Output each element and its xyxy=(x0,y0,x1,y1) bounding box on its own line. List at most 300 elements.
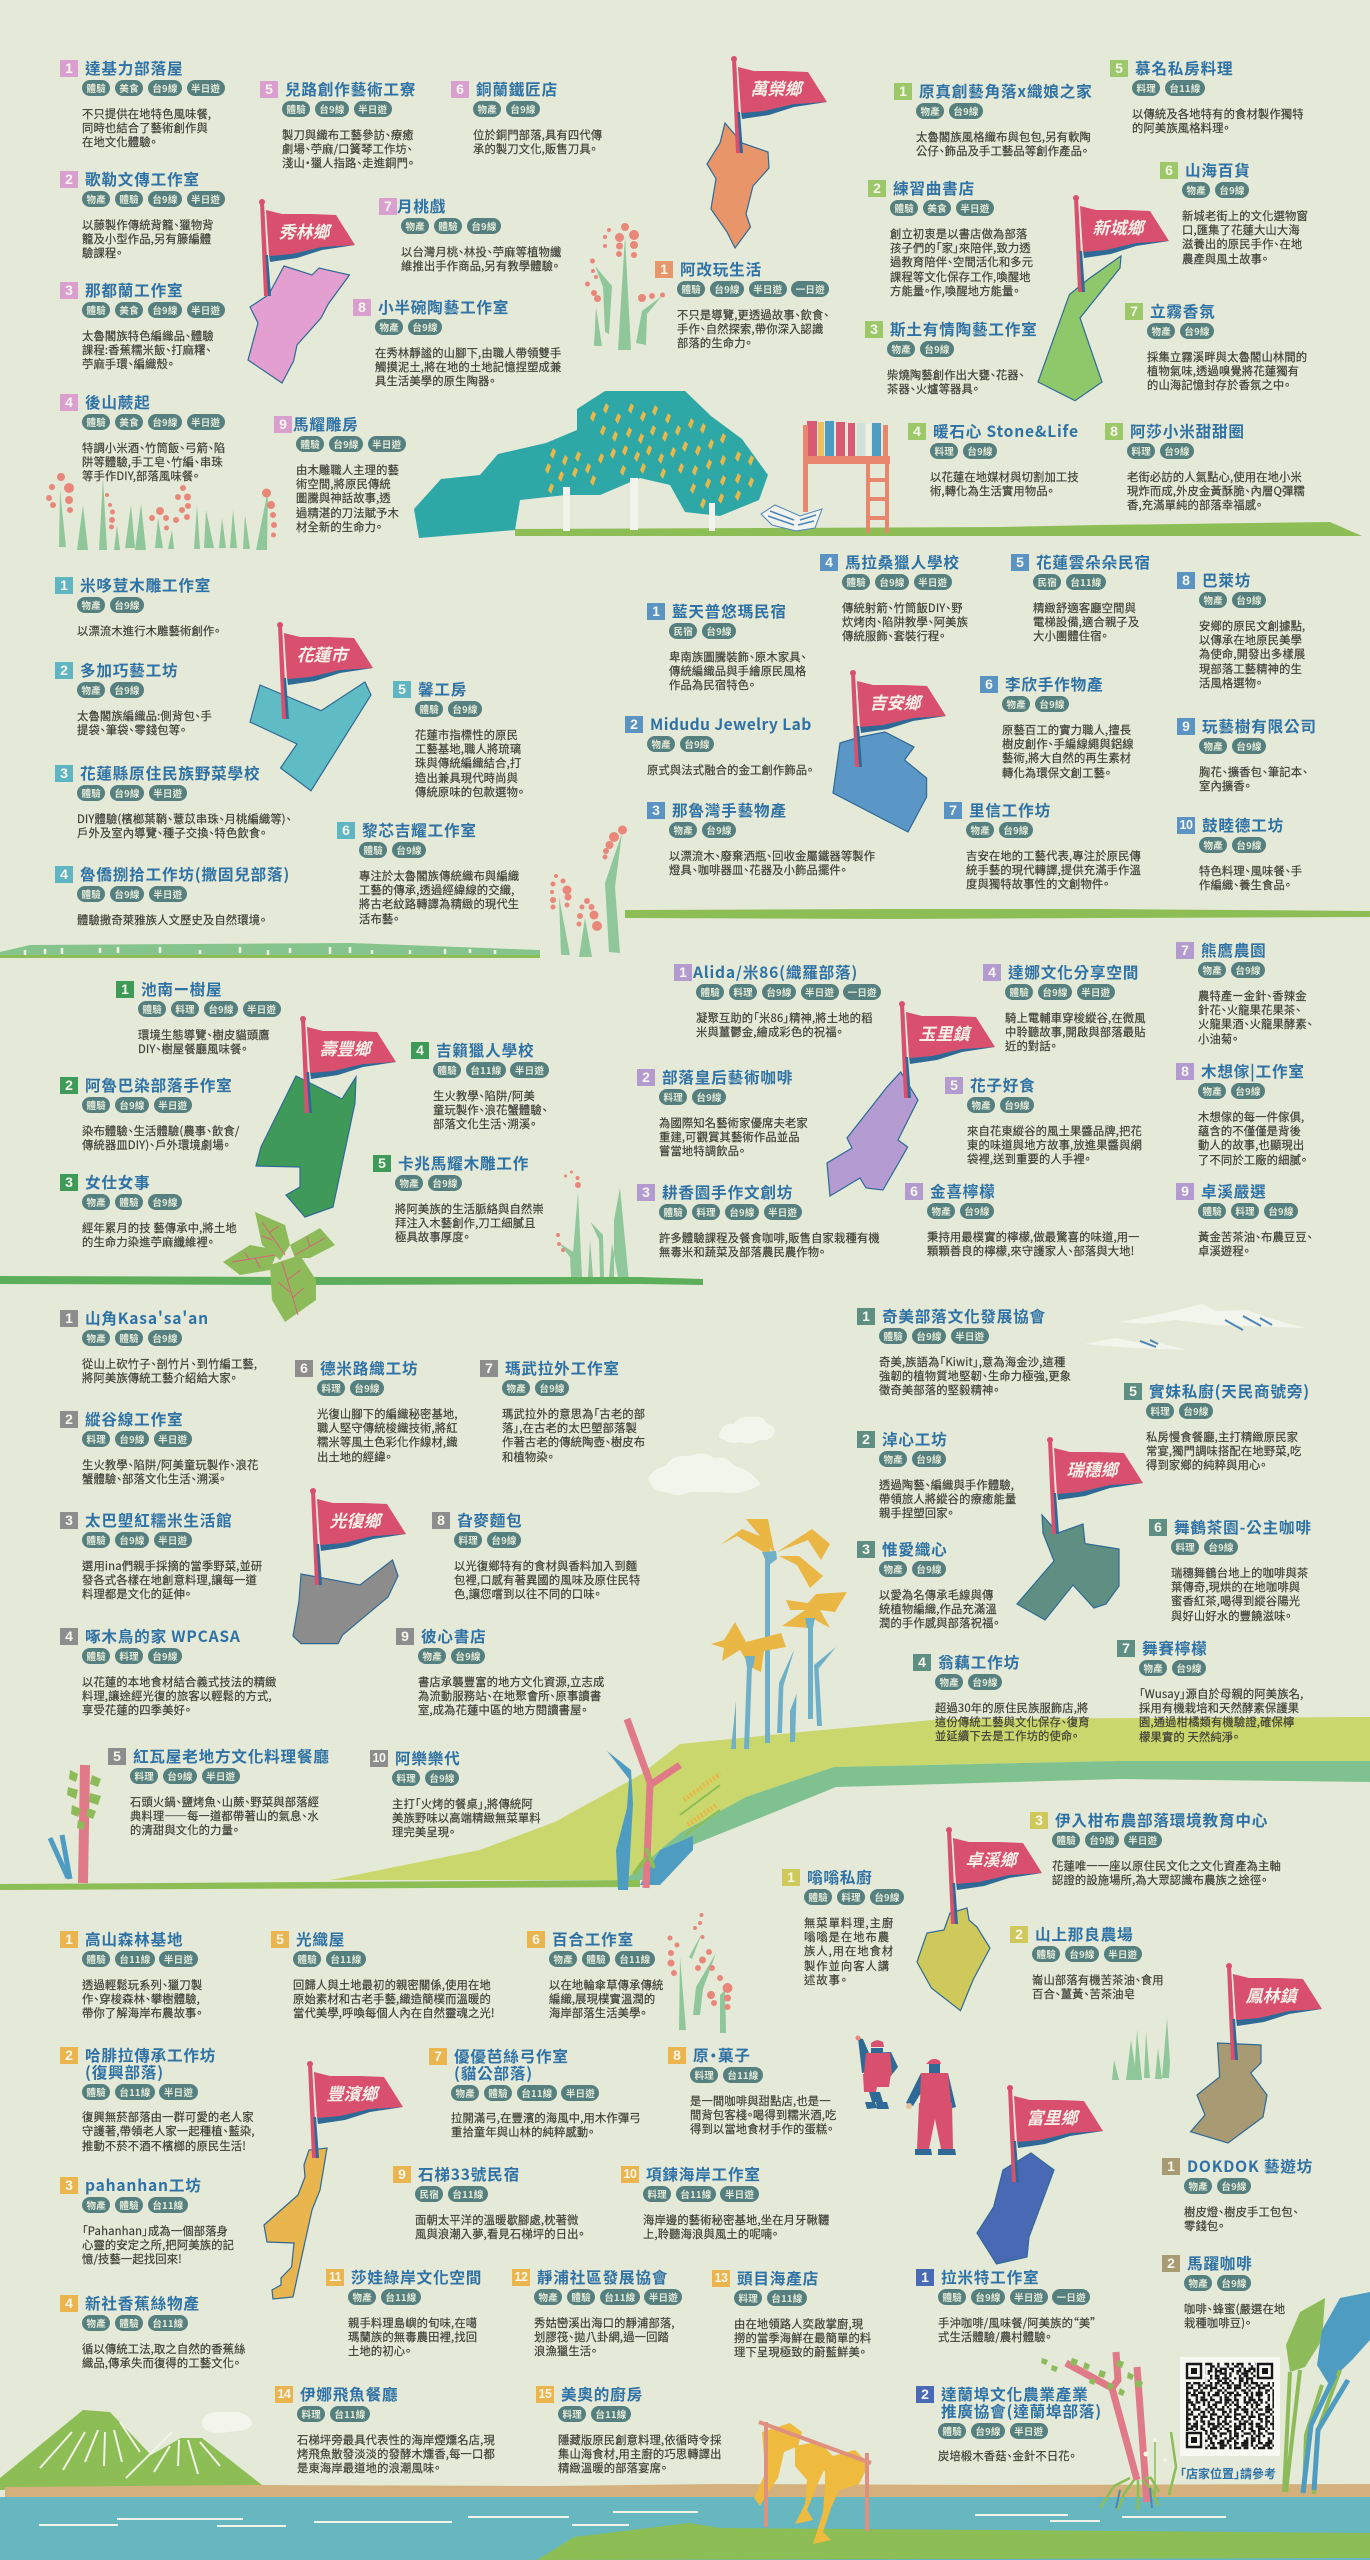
瑞穗鄉 1: 半日遊 xyxy=(955,1329,984,1343)
光復鄉 10: 美族野味以高端精緻無菜單料 xyxy=(392,1810,541,1826)
玉里鎮 1: 一日遊 xyxy=(848,985,877,999)
光復鄉 10: 10 xyxy=(373,1751,385,1765)
卓溪鄉 1: 述故事。 xyxy=(804,1972,848,1988)
吉安鄉 7: 統手藝的現代轉譯,提供充滿手作溫 xyxy=(966,862,1141,878)
豐濱鄉 14: 料理 xyxy=(302,2407,321,2421)
吉安鄉 2: 2 xyxy=(630,716,638,732)
瑞穗鄉 2: 親手捏塑回家。 xyxy=(879,1505,953,1521)
壽豐鄉 1: 環境生態導覽、樹皮貓頭鷹 xyxy=(138,1026,270,1042)
秀林鄉 2: 以藤製作傳統背籠、獵物背 xyxy=(82,216,214,232)
玉里鎮 9: 卓溪遊程。 xyxy=(1198,1243,1250,1259)
光復鄉 9: 書店承襲豐富的地方文化資源,立志成 xyxy=(418,1674,604,1690)
豐濱鄉 4: 循以傳統工法,取之自然的香蕉絲 xyxy=(82,2340,246,2356)
壽豐鄉 2: 台9線 xyxy=(119,1098,145,1112)
光復鄉 9: 物產 xyxy=(422,1649,442,1663)
flag: 鳳林鎮 xyxy=(1226,1963,1322,2060)
吉安鄉 8: 安鄉的原民文創據點, xyxy=(1199,618,1305,634)
光復鄉 1: 從山上砍竹子、剖竹片、到竹編工藝, xyxy=(82,1356,257,1372)
秀林鄉 9: 過精湛的刀法賦予木 xyxy=(296,505,399,521)
秀林鄉 6: 台9線 xyxy=(510,102,536,116)
光復鄉 2: 台9線 xyxy=(119,1432,145,1446)
卓溪鄉 3: 花蓮唯一一座以原住民文化之文化資產為主軸 xyxy=(1052,1858,1281,1874)
吉安鄉 4: 台9線 xyxy=(879,575,905,589)
新城鄉 1: 物產 xyxy=(920,104,940,118)
花蓮市 2: 提袋、筆袋、零錢包等。 xyxy=(77,722,186,738)
吉安鄉 8: 為使命,開發出多樣展 xyxy=(1199,646,1305,662)
花蓮市 4: 體驗 xyxy=(82,887,101,901)
玉里鎮 7: 針花、火龍果花果茶、 xyxy=(1198,1002,1301,1018)
新城鄉 7: 立霧香氛 xyxy=(1150,300,1216,322)
花蓮市 5: 工藝基地,職人將琉璃 xyxy=(415,741,521,757)
玉里鎮 8: 動人的故事,也顯現出 xyxy=(1198,1137,1304,1153)
grass near 鳳林 xyxy=(1112,2018,1170,2080)
秀林鄉 8: 物產 xyxy=(380,320,399,334)
壽豐鄉 4: 體驗 xyxy=(438,1063,457,1077)
flag: 萬榮鄉: 萬榮鄉 xyxy=(750,75,804,100)
豐濱鄉 9: 面朝太平洋的溫暖歇腳處,枕著微 xyxy=(415,2212,579,2228)
卓溪鄉 1: 1 xyxy=(787,1869,795,1885)
新城鄉 2: 過教育陪伴、空間活化和多元 xyxy=(890,254,1033,270)
豐濱鄉 3: 體驗 xyxy=(119,2198,139,2212)
光復鄉 1: 1 xyxy=(65,1310,73,1326)
豐濱鄉 13: 料理 xyxy=(738,2291,758,2305)
玉里鎮 9: 9 xyxy=(1181,1183,1189,1199)
新城鄉 1 xyxy=(894,80,1093,159)
瑞穗鄉 7: 舞賽檸檬 xyxy=(1142,1637,1208,1659)
壽豐鄉 5 xyxy=(373,1152,544,1245)
秀林鄉 7: 體驗 xyxy=(438,219,458,233)
吉安鄉 9 xyxy=(1177,715,1317,794)
瑞穗鄉 2: 2 xyxy=(862,1431,870,1447)
豐濱鄉 4: 新社香蕉絲物產 xyxy=(85,2292,200,2314)
吉安鄉 7: 台9線 xyxy=(1003,823,1029,837)
吉安鄉 10: 10 xyxy=(1180,818,1192,832)
flag: 秀林鄉: 秀林鄉 xyxy=(278,218,332,243)
豐濱鄉 14: 石梯坪旁最具代表性的海岸煙燻名店,現 xyxy=(297,2432,495,2448)
豐濱鄉 13: 台11線 xyxy=(771,2291,802,2305)
豐濱鄉 6: 物產 xyxy=(554,1952,573,1966)
秀林鄉 3: 台9線 xyxy=(152,303,178,317)
豐濱鄉 14: 烤飛魚散發淡淡的發酵木燻香,每一口都 xyxy=(297,2446,495,2462)
吉安鄉 9: 物產 xyxy=(1204,739,1223,753)
萬榮鄉 1: 台9線 xyxy=(714,282,740,296)
花蓮市 5: 珠與傳統編織結合,打 xyxy=(415,755,521,771)
壽豐鄉 1: 體驗 xyxy=(142,1002,162,1016)
瑞穗鄉 6 xyxy=(1149,1519,1312,1623)
光復鄉 9: 為流動服務站、在地聚會所、原事讀書 xyxy=(418,1688,601,1704)
豐濱鄉 4: 物產 xyxy=(86,2316,106,2330)
豐濱鄉 8: 間背包客棧。喝得到糯米酒,吃 xyxy=(690,2107,836,2123)
光復鄉 10: 阿樂樂代 xyxy=(395,1747,461,1769)
玉里鎮 5: 袋裡,送到重要的人手裡。 xyxy=(967,1151,1091,1167)
豐濱鄉 2: 半日遊 xyxy=(164,2084,193,2098)
光復鄉 4: 料理,讓途經光復的旅客以輕鬆的方式, xyxy=(82,1688,272,1704)
豐濱鄉 2 xyxy=(60,2047,255,2153)
新城鄉 3: 物產 xyxy=(892,342,911,356)
玉里鎮 9: 料理 xyxy=(1235,1204,1255,1218)
鳳林鎮 1: 台9線 xyxy=(1221,2179,1247,2193)
卓溪鄉 3 xyxy=(1030,1812,1281,1887)
flag: 玉里鎮: 玉里鎮 xyxy=(918,1020,972,1045)
瑞穗鄉 2: 帶領旅人將縱谷的療癒能量 xyxy=(879,1491,1016,1507)
瑞穗鄉 5: 台9線 xyxy=(1183,1404,1209,1418)
吉安鄉 8: 巴萊坊 xyxy=(1202,569,1251,591)
豐濱鄉 12: 12 xyxy=(515,2270,527,2284)
富里鄉 2: 半日遊 xyxy=(1014,2424,1043,2438)
瑞穗鄉 1: 奇美,族語為「Kiwit」,意為海金沙,這種 xyxy=(879,1354,1065,1370)
玉里鎮 2: 重建,可觀賞其藝術作品並品 xyxy=(659,1129,800,1145)
玉里鎮 8: 蘊含的不僅僅是背後 xyxy=(1198,1123,1301,1139)
秀林鄉 9: 由木雕職人主理的藝 xyxy=(296,462,399,478)
豐濱鄉 11: 11 xyxy=(329,2270,341,2284)
富里鄉 1: 台9線 xyxy=(975,2290,1001,2304)
flag: 壽豐鄉: 壽豐鄉 xyxy=(320,1035,373,1060)
光復鄉 10 xyxy=(370,1750,541,1840)
吉安鄉 5: 台11線 xyxy=(1070,575,1101,589)
玉里鎮 7: 火龍果酒、火龍果酵素、 xyxy=(1198,1016,1313,1032)
豐濱鄉 3: 3 xyxy=(65,2177,73,2193)
吉安鄉 5: 5 xyxy=(1016,554,1024,570)
瑞穗鄉 6: 葉傳奇,現烘的在地咖啡與 xyxy=(1171,1579,1300,1595)
豐濱鄉 1: 高山森林基地 xyxy=(85,1928,183,1950)
壽豐鄉 5: 極具故事厚度。 xyxy=(395,1229,469,1245)
光復鄉 9: 台9線 xyxy=(455,1649,481,1663)
tree xyxy=(414,391,768,538)
壽豐鄉 3: 經年累月的技 藝傳承中,將土地 xyxy=(82,1220,237,1236)
光復鄉 3: 選用ina們親手採摘的當季野菜,並研 xyxy=(82,1558,262,1574)
富里鄉 1 xyxy=(916,2269,1096,2344)
新城鄉 1: 原真創藝角落x織娘之家 xyxy=(919,80,1093,102)
豐濱鄉 1: 體驗 xyxy=(86,1952,106,1966)
豐濱鄉 14: 14 xyxy=(278,2387,290,2401)
吉安鄉 3: 以漂流木、廢棄洒瓶、回收金屬鐵器等製作 xyxy=(669,848,875,864)
新城鄉 4: 以花蓮在地媒材與切割加工技 xyxy=(930,468,1079,484)
豐濱鄉 11: 瑪蘭族的無毒農田裡,找回 xyxy=(348,2329,477,2345)
花蓮市 3: 台9線 xyxy=(114,786,140,800)
新城鄉 3: 茶器、火爐等器具。 xyxy=(887,381,979,397)
豐濱鄉 4 xyxy=(60,2295,246,2370)
flag: 花蓮市 xyxy=(277,622,373,719)
吉安鄉 9: 台9線 xyxy=(1236,739,1262,753)
壽豐鄉 4 xyxy=(411,1039,549,1132)
瑞穗鄉 6: 蜜香紅茶,喝得到縱谷陽光 xyxy=(1171,1593,1300,1609)
光復鄉 1: 體驗 xyxy=(119,1331,139,1345)
玉里鎮 9: 台9線 xyxy=(1268,1204,1294,1218)
map: 豐濱鄉 xyxy=(264,2148,327,2299)
新城鄉 5: 料理 xyxy=(1136,81,1156,95)
秀林鄉 4: 4 xyxy=(65,394,73,410)
玉里鎮 5: 台9線 xyxy=(1004,1098,1030,1112)
萬榮鄉 1: 部落的生命力。 xyxy=(677,335,751,351)
豐濱鄉 1: 1 xyxy=(65,1931,73,1947)
豐濱鄉 12: 半日遊 xyxy=(649,2290,678,2304)
富里鄉 2: 台9線 xyxy=(975,2424,1001,2438)
吉安鄉 10: 鼓睦德工坊 xyxy=(1202,814,1284,836)
光復鄉 5: 的清甜與文化的力量。 xyxy=(130,1822,239,1838)
plants: flower stalks near 阿改玩生活 xyxy=(585,223,665,350)
新城鄉 2: 體驗 xyxy=(894,201,914,215)
豐濱鄉 3 xyxy=(60,2177,234,2267)
flag: 鳳林鎮: 鳳林鎮 xyxy=(1246,1982,1299,2007)
光復鄉 3: 半日遊 xyxy=(158,1533,187,1547)
秀林鄉 9: 台9線 xyxy=(333,437,359,451)
光復鄉 6: 6 xyxy=(300,1360,308,1376)
秀林鄉 8: 在秀林靜謐的山腳下,由職人帶領雙手 xyxy=(375,344,561,360)
秀林鄉 3: 半日遊 xyxy=(191,303,220,317)
玉里鎮 6: 秉持用最樸實的檸檬,做最驚喜的味道,用一 xyxy=(927,1228,1140,1244)
新城鄉 8: 8 xyxy=(1110,423,1118,439)
秀林鄉 9: 馬耀雕房 xyxy=(293,413,359,435)
flag: 光復鄉 xyxy=(310,1488,406,1585)
吉安鄉 4: 炊烤肉、陷阱教學、阿美族 xyxy=(842,614,968,630)
壽豐鄉 1: 池南ー樹屋 xyxy=(141,978,222,1000)
光復鄉 2: 生火教學、陷阱/阿美童玩製作、浪花 xyxy=(82,1456,258,1472)
新城鄉 1: 公仔、飾品及手工藝品等創作產品。 xyxy=(916,143,1088,159)
flag: 吉安鄉: 吉安鄉 xyxy=(870,689,923,714)
萬榮鄉 1: 不只是導覽,更透過故事、飲食、 xyxy=(677,306,829,322)
壽豐鄉 2: 阿魯巴染部落手作室 xyxy=(85,1074,233,1096)
光復鄉 7 xyxy=(480,1360,645,1464)
吉安鄉 6: 原藝百工的實力職人,擅長 xyxy=(1002,722,1131,738)
光復鄉 3: 3 xyxy=(65,1512,73,1528)
吉安鄉 9: 胸花、擴香包、筆記本、 xyxy=(1199,764,1308,780)
卓溪鄉 1: 製作並向客人講 xyxy=(804,1958,890,1974)
豐濱鄉 10: 半日遊 xyxy=(725,2187,754,2201)
豐濱鄉 11: 土地的初心。 xyxy=(348,2343,411,2359)
玉里鎮 3 xyxy=(637,1184,880,1259)
壽豐鄉 4: 部落文化生活、溯溪。 xyxy=(433,1116,536,1132)
豐濱鄉 5: 光織屋 xyxy=(296,1928,345,1950)
新城鄉 7: 採集立霧溪畔與太魯閣山林間的 xyxy=(1147,348,1307,364)
豐濱鄉 6: 海岸部落生活美學。 xyxy=(549,2005,646,2021)
卓溪鄉 2: 半日遊 xyxy=(1108,1947,1137,1961)
map: 萬榮鄉 xyxy=(707,123,769,248)
map: 吉安鄉 xyxy=(833,732,927,832)
卓溪鄉 1: 無菜單料理,主廚 xyxy=(804,1914,894,1930)
plants: grass near 卡兆馬耀 xyxy=(556,1170,628,1277)
花蓮市 1: 1 xyxy=(60,577,68,593)
新城鄉 4: 台9線 xyxy=(967,444,993,458)
吉安鄉 9: 9 xyxy=(1182,718,1190,734)
吉安鄉 5: 精緻舒適客廳空間與 xyxy=(1033,600,1136,616)
光復鄉 8: 包裡,口感有著異國的風味及原住民特 xyxy=(454,1572,640,1588)
吉安鄉 4: 體驗 xyxy=(846,575,866,589)
花蓮市 4 xyxy=(55,863,290,928)
玉里鎮 3: 耕香園手作文創坊 xyxy=(662,1181,793,1203)
豐濱鄉 14 xyxy=(275,2386,495,2476)
吉安鄉 1: 卑南族圖騰裝飾、原木家具、 xyxy=(669,648,807,664)
玉里鎮 4: 達娜文化分享空間 xyxy=(1008,961,1139,983)
秀林鄉 3: 課程:香蕉糯米飯、打麻糬、 xyxy=(82,342,211,358)
flag: 新城鄉 xyxy=(1073,195,1169,292)
瑞穗鄉 4: 台9線 xyxy=(972,1675,998,1689)
光復鄉 8 xyxy=(432,1512,640,1602)
光復鄉 7: 瑪武拉外工作室 xyxy=(505,1357,620,1379)
光復鄉 1: 將阿美族傳統工藝介紹給大家。 xyxy=(82,1370,237,1386)
秀林鄉 8: 觸摸泥土,將在地的土地記憶捏塑成兼 xyxy=(375,359,561,375)
秀林鄉 2: 籠及小型作品,另有籐編體 xyxy=(82,231,211,247)
秀林鄉 2: 歌勒文傳工作室 xyxy=(85,168,200,190)
map: 富里鄉 xyxy=(977,2153,1054,2264)
豐濱鄉 11: 物產 xyxy=(352,2290,372,2304)
萬榮鄉 1: 1 xyxy=(660,261,668,277)
新城鄉 7 xyxy=(1125,300,1307,393)
玉里鎮 9 xyxy=(1176,1183,1313,1258)
新城鄉 2 xyxy=(868,177,1033,299)
秀林鄉 5: 製刀與織布工藝參訪、療癒 xyxy=(282,126,414,142)
玉里鎮 9: 黃金苦茶油、布農豆豆、 xyxy=(1198,1228,1313,1244)
吉安鄉 7: 7 xyxy=(949,802,957,818)
玉里鎮 3: 半日遊 xyxy=(768,1205,797,1219)
豐濱鄉 3: pahanhan工坊 xyxy=(85,2174,202,2196)
瑞穗鄉 5: 常宴,獨門調味搭配在地野菜,吃 xyxy=(1146,1443,1301,1459)
新城鄉 8 xyxy=(1105,420,1305,513)
吉安鄉 9: 室內擴香。 xyxy=(1199,778,1251,794)
壽豐鄉 3 xyxy=(60,1171,237,1250)
玉里鎮 2: 嘗當地特調飲品。 xyxy=(659,1143,745,1159)
豐濱鄉 2: 守護著,帶領老人家一起種植、藍染, xyxy=(82,2123,255,2139)
新城鄉 2: 美食 xyxy=(927,201,947,215)
花蓮市 3: 半日遊 xyxy=(153,786,182,800)
壽豐鄉 4: 童玩製作、浪花蟹體驗、 xyxy=(433,1102,548,1118)
光復鄉 5: 典料理——每一道都帶著山的氣息、水 xyxy=(130,1808,319,1824)
秀林鄉 5: 淺山·獵人指路、走進銅門。 xyxy=(282,155,414,171)
秀林鄉 4: 美食 xyxy=(119,415,139,429)
吉安鄉 2: Midudu Jewelry Lab xyxy=(650,713,812,735)
新城鄉 7: 物產 xyxy=(1152,324,1171,338)
卓溪鄉 1 xyxy=(782,1869,904,1988)
吉安鄉 10: 作編織、養生食品。 xyxy=(1199,877,1291,893)
富里鄉 1: 一日遊 xyxy=(1057,2290,1086,2304)
玉里鎮 9: 體驗 xyxy=(1202,1204,1222,1218)
光復鄉 5: 紅瓦屋老地方文化料理餐廳 xyxy=(133,1745,330,1767)
光復鄉 2: 2 xyxy=(65,1411,73,1427)
吉安鄉 8: 以傳承在地原民美學 xyxy=(1199,632,1302,648)
豐濱鄉 8: 8 xyxy=(673,2047,681,2063)
玉里鎮 4: 騎上電輔車穿梭縱谷,在微風 xyxy=(1005,1010,1146,1026)
玉里鎮 7: 農特產ー金針、香辣金 xyxy=(1198,988,1307,1004)
豐濱鄉 13: 13 xyxy=(715,2271,727,2285)
plant: red-veined leaves xyxy=(223,1212,335,1322)
玉里鎮 6: 金喜檸檬 xyxy=(930,1180,996,1202)
花蓮市 5: 花蓮市指標性的原民 xyxy=(415,726,518,742)
光復鄉 3: 發各式各樣在地創意料理,讓每一道 xyxy=(82,1572,257,1588)
花蓮市 3: 戶外及室內導覽、種子交換、特色飲食。 xyxy=(77,825,266,841)
豐濱鄉 10: 項鍊海岸工作室 xyxy=(646,2163,761,2185)
花蓮市 5: 造出兼具現代時尚與 xyxy=(415,770,518,786)
吉安鄉 5: 花蓮雲朵朵民宿 xyxy=(1036,551,1151,573)
瑞穗鄉 3: 台9線 xyxy=(916,1562,942,1576)
秀林鄉 6: 6 xyxy=(456,81,464,97)
ground strips xyxy=(0,522,1370,1285)
新城鄉 3: 斯土有情陶藝工作室 xyxy=(890,318,1038,340)
新城鄉 2: 創立初衷是以書店做為部落 xyxy=(890,226,1027,242)
新城鄉 6: 口,匯集了花蓮大山大海 xyxy=(1182,222,1300,238)
瑞穗鄉 3 xyxy=(857,1541,999,1631)
卓溪鄉 1: 族人,用在地食材 xyxy=(804,1943,894,1959)
壽豐鄉 4: 生火教學、陷阱/阿美 xyxy=(433,1088,535,1104)
flag: 瑞穗鄉: 瑞穗鄉 xyxy=(1066,1456,1120,1481)
秀林鄉 8: 8 xyxy=(358,299,366,315)
花蓮市 6: 黎芯吉耀工作室 xyxy=(362,819,477,841)
萬榮鄉 1: 一日遊 xyxy=(796,282,825,296)
豐濱鄉 6: 體驗 xyxy=(586,1952,606,1966)
flag: 花蓮市: 花蓮市 xyxy=(296,641,350,666)
玉里鎮 8 xyxy=(1176,1063,1307,1167)
豐濱鄉 1: 半日遊 xyxy=(164,1952,193,1966)
吉安鄉 8: 8 xyxy=(1182,572,1190,588)
光復鄉 4 xyxy=(60,1628,277,1718)
壽豐鄉 1: 料理 xyxy=(175,1002,195,1016)
秀林鄉 4: 特調小米酒、竹筒飯、弓箭、陷 xyxy=(82,440,225,456)
新城鄉 2: 2 xyxy=(873,180,881,196)
光復鄉 4: 4 xyxy=(65,1628,73,1644)
吉安鄉 4: 傳統射箭、竹筒飯DIY、野 xyxy=(842,600,963,616)
秀林鄉 5: 台9線 xyxy=(319,102,345,116)
豐濱鄉 13: 由在地領路人奕啟掌廚,現 xyxy=(734,2316,863,2332)
瑞穗鄉 4 xyxy=(913,1654,1090,1744)
新城鄉 3: 台9線 xyxy=(924,342,950,356)
光復鄉 5: 5 xyxy=(113,1748,121,1764)
花蓮市 2: 太魯閣族編織品:側背包、手 xyxy=(77,708,212,724)
新城鄉 8: 阿莎小米甜甜圈 xyxy=(1130,420,1245,442)
光復鄉 7: 和植物染。 xyxy=(502,1449,554,1465)
吉安鄉 2: 台9線 xyxy=(684,737,710,751)
光復鄉 5: 石頭火鍋、鹽烤魚、山蕨、野菜與部落經 xyxy=(130,1794,319,1810)
新城鄉 8: 現炸而成,外皮金黃酥脆、內層Q彈糯 xyxy=(1127,483,1305,499)
秀林鄉 6 xyxy=(451,78,602,157)
瑞穗鄉 4: 並延續下去是工作坊的使命。 xyxy=(935,1728,1078,1744)
壽豐鄉 3: 體驗 xyxy=(119,1195,139,1209)
瑞穗鄉 3: 惟愛織心 xyxy=(882,1538,948,1560)
鳳林鎮 2: 栽種咖啡豆)。 xyxy=(1184,2315,1251,2331)
豐濱鄉 5: 回歸人與土地最初的親密關係,使用在地 xyxy=(293,1976,491,1992)
新城鄉 6: 滋養出的原民手作、在地 xyxy=(1182,236,1302,252)
豐濱鄉 4: 體驗 xyxy=(119,2316,139,2330)
豐濱鄉 9: 石梯33號民宿 xyxy=(418,2163,520,2185)
玉里鎮 6: 顆顆善良的檸檬,來守護家人、部落與大地! xyxy=(927,1243,1134,1259)
豐濱鄉 7: (貓公部落) xyxy=(454,2062,533,2084)
新城鄉 6: 農產與風土故事。 xyxy=(1182,251,1268,267)
豐濱鄉 9: 民宿 xyxy=(420,2187,439,2201)
瑞穗鄉 5: 私房慢食餐廳,主打精緻原民家 xyxy=(1146,1428,1298,1444)
玉里鎮 1: 體驗 xyxy=(700,985,720,999)
秀林鄉 1: 1 xyxy=(65,60,73,76)
玉里鎮 4: 台9線 xyxy=(1042,985,1068,999)
瑞穗鄉 7 xyxy=(1117,1640,1303,1744)
tree: pink stalk with leaves xyxy=(50,1765,101,1883)
富里鄉 2: 2 xyxy=(921,2386,929,2402)
map: 光復鄉 xyxy=(293,1560,398,1644)
新城鄉 6: 6 xyxy=(1165,162,1173,178)
flag: 豐濱鄉 xyxy=(307,2061,403,2158)
flag: 吉安鄉 xyxy=(850,670,946,767)
秀林鄉 1: 不只提供在地特色風味餐, xyxy=(82,106,211,122)
光復鄉 6: 光復山腳下的編織秘密基地, xyxy=(317,1406,458,1422)
花蓮市 3 xyxy=(55,762,292,841)
瑞穗鄉 2: 淖心工坊 xyxy=(882,1428,948,1450)
吉安鄉 5 xyxy=(1011,551,1151,644)
豐濱鄉 2: 推動不菸不酒不檳榔的原民生活! xyxy=(82,2138,246,2154)
壽豐鄉 3: 女仕女事 xyxy=(85,1171,151,1193)
豐濱鄉 2: (復興部落) xyxy=(85,2060,164,2082)
秀林鄉 4: 阱等體驗,手工皂、竹編、串珠 xyxy=(82,454,223,470)
玉里鎮 5: 東的味道與地方故事,放進果醬與網 xyxy=(967,1137,1142,1153)
map: 鳳林鎮 xyxy=(1191,2043,1267,2143)
豐濱鄉 4: 織品,傳承失而復得的工藝文化。 xyxy=(82,2355,240,2371)
玉里鎮 2: 台9線 xyxy=(696,1090,722,1104)
鳳林鎮 1: 物產 xyxy=(1188,2179,1208,2193)
